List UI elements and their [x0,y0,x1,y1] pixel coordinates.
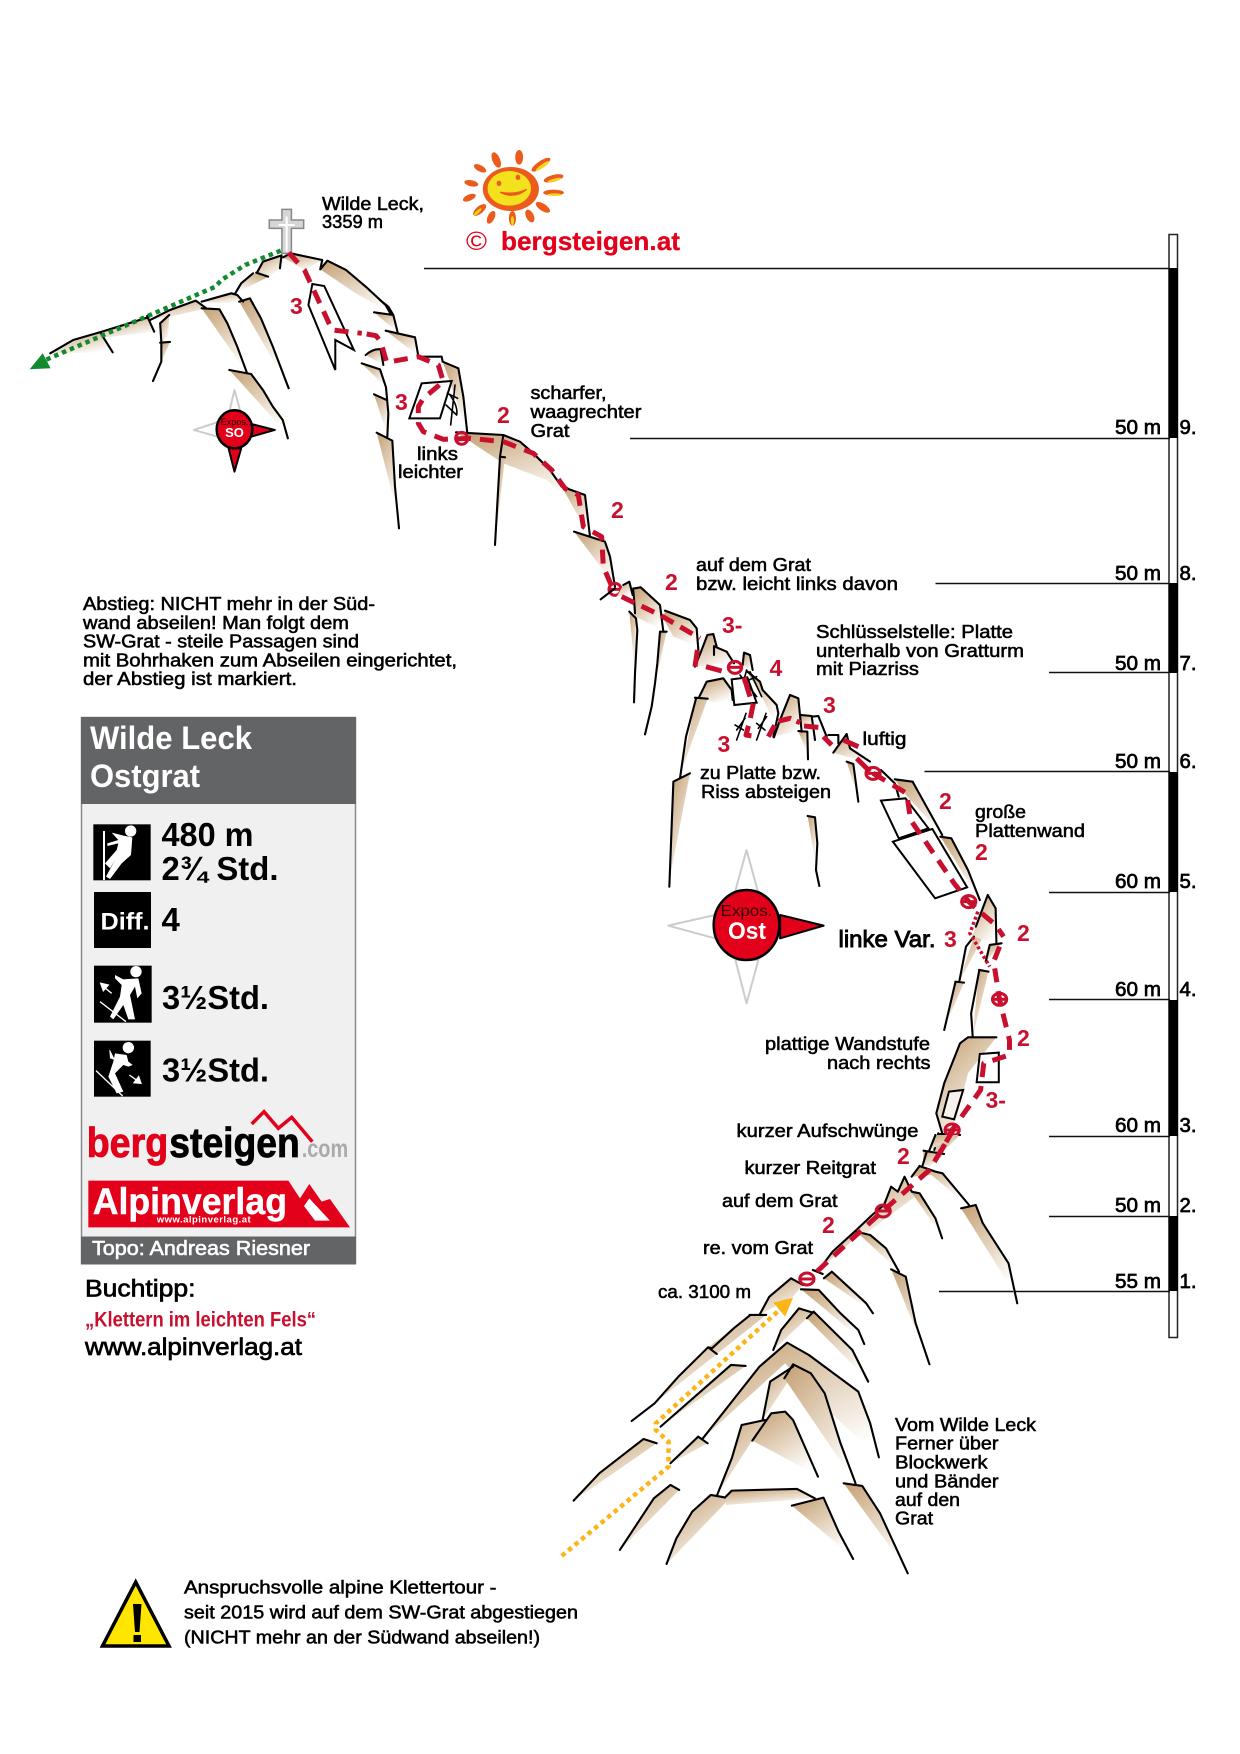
text block: descent note: der Abstieg ist markiert. [83,668,297,689]
card header: Ostgrat [90,758,200,794]
annotations on the topo [322,193,1085,1528]
stat: ascent time: 3½Std. [162,979,269,1016]
card header [81,717,356,804]
route grades in red: 2 [665,569,678,595]
annotations on the topo: auf den [895,1489,960,1510]
pitch lengths and numbers: 4. [1180,979,1196,1001]
annotations on the topo: Vom Wilde Leck [895,1414,1037,1435]
middle ridge topo: key pitch section [601,582,870,887]
route grades in red [290,293,1030,1238]
route grades in red: 3 [718,731,730,757]
upper ridge topo: summit section [50,253,391,438]
annotations on the topo: Blockwerk [895,1452,988,1472]
annotations on the topo: Ferner über [895,1432,998,1454]
pitch lengths and numbers: 60 m [1115,871,1161,893]
route grades in red: 3 [823,692,836,718]
pitch lengths and numbers: 50 m [1115,417,1161,439]
annotations on the topo: auf dem Grat [722,1190,838,1211]
climbing route middle: red dashed [622,597,1009,1160]
annotations on the topo: und Bänder [895,1470,998,1492]
panel: tour data card [81,717,356,1264]
upper ridge topo: horizontal crest section [362,300,615,587]
annotations on the topo: luftig [862,728,906,749]
annotations on the topo: zu Platte bzw. [700,762,821,783]
icon: ascent hiker [94,966,152,1023]
pitch lengths and numbers: 9. [1180,417,1196,439]
icon: sun logo [461,150,565,226]
pitch lengths and numbers: 1. [1180,1271,1196,1293]
route grades in red: 2 [497,402,510,428]
middle ridge topo: slab section [881,770,1002,1160]
annotations on the topo: mit Piazriss [816,658,919,679]
route grades in red: 2 [822,1212,835,1238]
route grades in red: 3 [944,926,957,952]
logo: Alpinverlag [88,1181,350,1227]
logo text: bergsteigen.at copyright: bergsteigen.at [501,226,680,256]
pitch lengths and numbers [1115,417,1196,1293]
text block: book tip: www.alpinverlag.at [84,1334,302,1361]
text block: warning note: seit 2015 wird auf dem SW-Grat abgestiegen [184,1602,578,1622]
stat: length and time: 480 m [162,816,254,853]
text block: descent note: wand abseilen! Man folgt dem [82,612,349,633]
annotations on the topo: auf dem Grat [696,554,811,575]
annotations on the topo: nach rechts [827,1052,930,1073]
text block: book tip: „Klettern im leichten Fels“ [85,1308,316,1332]
annotations on the topo: kurzer Reitgrat [744,1157,876,1178]
logo: bergsteigen.com [87,1112,348,1166]
icon: difficulty badge [94,892,151,948]
exposition compass: Ost: Expos. [720,903,772,920]
text block: book tip [84,1276,316,1361]
route grades in red: 2 [939,788,952,814]
annotations on the topo: ca. 3100 m [658,1281,751,1302]
annotations on the topo: Grat [895,1508,933,1528]
text block: descent note: SW-Grat - steile Passagen sind [83,630,359,652]
exposition compass: Ost [668,850,824,1003]
route grades in red: 2 [897,1143,910,1169]
logo: bergsteigen.com: .com [302,1135,348,1163]
text block: warning note: (NICHT mehr an der Südwand abseilen!) [184,1626,540,1648]
annotations on the topo: leichter [398,461,463,482]
pitch lengths and numbers: 8. [1180,563,1196,585]
pitch lengths and numbers: 60 m [1115,979,1161,1001]
pitch lengths and numbers: 50 m [1115,751,1161,773]
pitch lengths and numbers: 50 m [1115,653,1161,675]
annotations on the topo: plattige Wandstufe [765,1033,930,1054]
route grades in red: 4 [770,655,782,681]
pitch lengths and numbers: 2. [1180,1195,1196,1217]
card footer: author: Topo: Andreas Riesner [92,1238,310,1260]
pitch lengths and numbers: 60 m [1115,1115,1161,1137]
logo: Alpinverlag: www.alpinverlag.at [156,1215,252,1226]
annotations on the topo: links [417,443,458,464]
stat: length and time [162,816,278,887]
logo: bergsteigen.com: steigen [169,1119,300,1166]
exposition compass: SO [194,390,275,472]
text block: descent note [82,593,457,689]
route grades in red: 3- [986,1087,1006,1113]
card header: Wilde Leck [90,720,252,756]
climbing route upper: red dashed [289,253,621,595]
route grades in red: 2 [1017,1025,1030,1051]
annotations on the topo: unterhalb von Gratturm [816,640,1024,661]
logo: bergsteigen.com: berg [87,1119,168,1166]
annotations on the topo: waagrechter [529,401,642,422]
exposition compass: SO: SO [225,425,244,440]
descent route: green dotted line with arrow [30,251,281,369]
logo: Alpinverlag: Alpinverlag [93,1181,287,1222]
icon: difficulty badge: Diff. [100,908,150,936]
annotations on the topo: Riss absteigen [701,781,831,802]
stat: difficulty value: 4 [162,901,180,938]
icon: descent hiker [94,1041,151,1097]
pitch lengths and numbers: 3. [1180,1115,1196,1137]
card footer: author [81,1236,356,1264]
text block: book tip: Buchtipp: [85,1276,196,1302]
annotations on the topo: re. vom Grat [703,1237,813,1258]
route grades in red: 2 [1017,920,1030,946]
text block: descent note: mit Bohrhaken zum Abseilen eingerichtet, [83,650,457,670]
exposition compass: SO: Expos. [221,417,248,427]
icon: warning triangle [102,1582,169,1646]
annotations on the topo: Wilde Leck, [322,193,424,214]
pitch lengths and numbers: 6. [1180,751,1196,773]
pitch lengths and numbers: 7. [1180,653,1196,675]
annotations on the topo: Schlüsselstelle: Platte [816,621,1013,642]
route grades in red: 3- [722,612,742,638]
text block: warning note [184,1576,578,1648]
annotations on the topo: große [975,801,1026,822]
annotations on the topo: kurzer Aufschwünge [736,1120,918,1141]
text block: descent note: Abstieg: NICHT mehr in der Süd- [83,593,375,614]
route grades in red: 2 [975,839,988,865]
annotations on the topo: Grat [530,420,570,441]
pitch lengths and numbers: 5. [1180,871,1196,893]
stat: length and time: 2¾ Std. [162,850,278,887]
stat: descent time: 3½Std. [162,1052,269,1088]
altitude scale bar [424,234,1178,1338]
pitch lengths and numbers: 50 m [1115,1195,1161,1217]
approach route: yellow dotted line with arrow [562,1298,793,1556]
icon: climber [93,824,151,880]
annotations on the topo: scharfer, [530,382,606,403]
annotations on the topo: bzw. leicht links davon [696,573,898,594]
annotations on the topo: Plattenwand [975,820,1085,841]
annotations on the topo: 3359 m [322,211,383,232]
cross on the summit [269,209,304,253]
annotations on the topo: linke Var. [838,926,936,952]
route grades in red: 2 [611,497,624,523]
route grades in red: 3 [395,389,408,415]
climbing route lower: red dashed [800,1130,953,1285]
logo text: bergsteigen.at copyright: © [466,226,487,256]
pitch lengths and numbers: 50 m [1115,563,1161,585]
pitch lengths and numbers: 55 m [1115,1271,1161,1293]
exposition compass: Ost: Ost [728,918,766,945]
route grades in red: 3 [290,293,303,319]
text block: warning note: Anspruchsvolle alpine Klettertour - [184,1576,496,1598]
lower ridge topo [574,1135,1017,1573]
